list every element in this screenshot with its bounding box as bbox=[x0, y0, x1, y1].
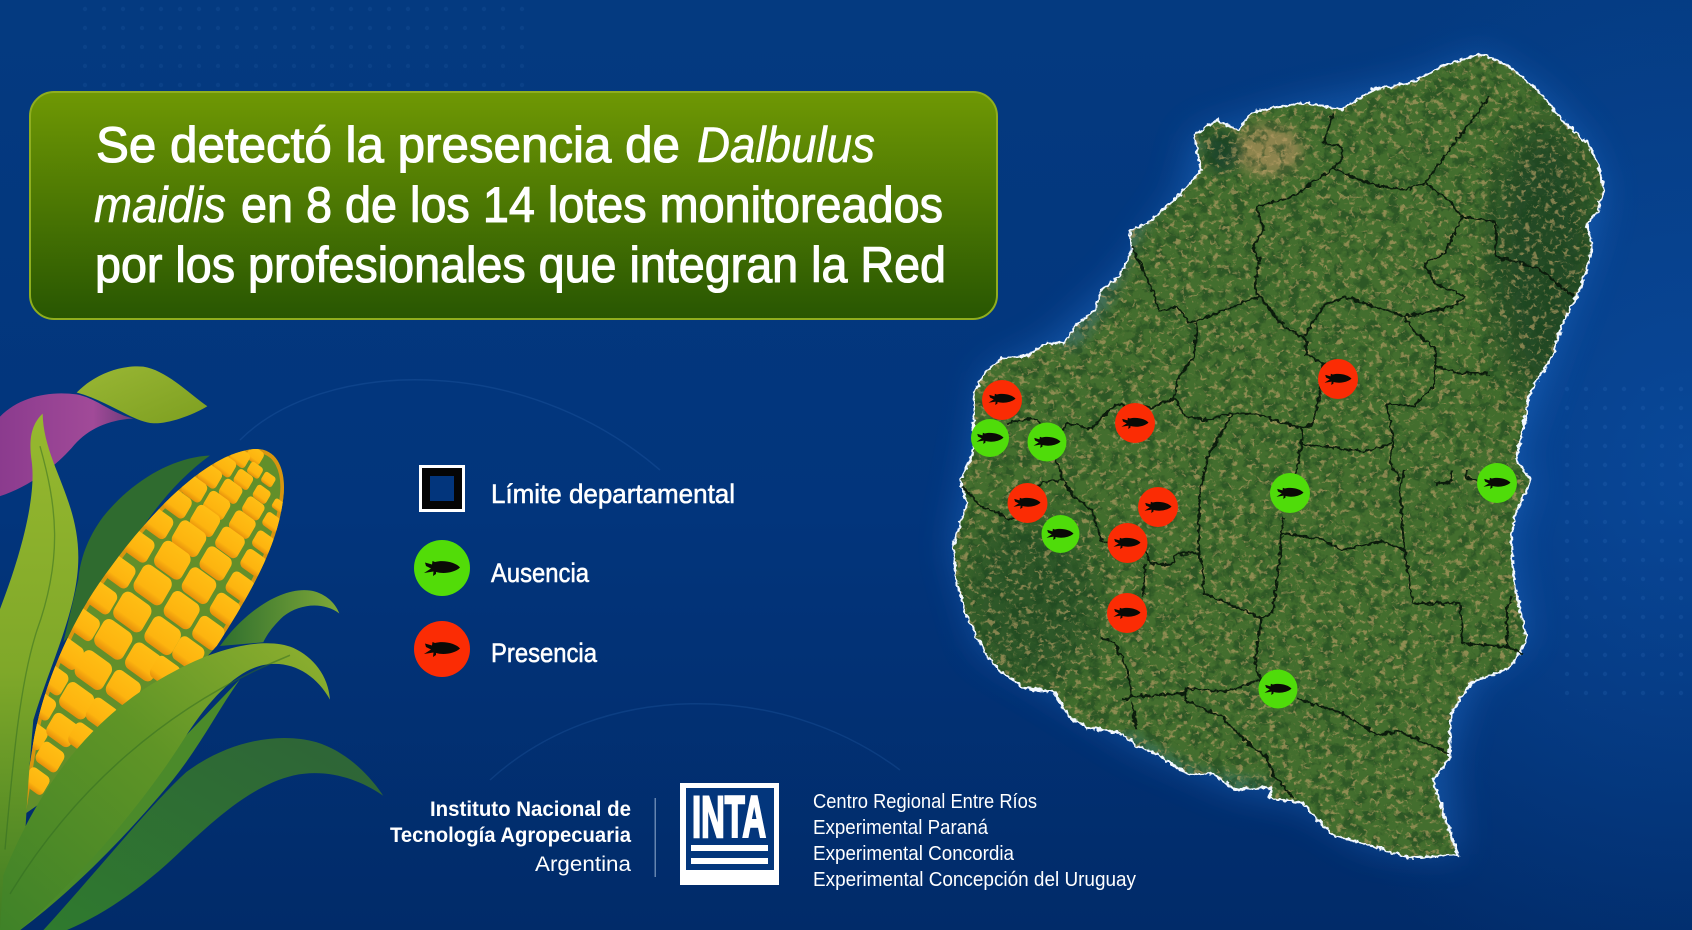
marker: presence bbox=[1107, 593, 1147, 633]
marker: presence bbox=[1008, 483, 1048, 523]
marker: presence bbox=[1138, 487, 1178, 527]
marker: absence bbox=[1028, 422, 1066, 462]
map glow bbox=[953, 54, 1604, 855]
marker: presence bbox=[1108, 523, 1148, 563]
department boundaries bbox=[962, 97, 1574, 798]
corn illustration bbox=[0, 366, 383, 930]
marker: absence bbox=[1258, 670, 1298, 708]
front leaf vein bbox=[10, 655, 290, 894]
lower mid leaf bbox=[13, 679, 240, 930]
left leaf vein bbox=[5, 446, 55, 850]
legend item: absence: Ausencia bbox=[491, 558, 590, 588]
monitoring markers bbox=[971, 359, 1517, 708]
title banner: maidis bbox=[94, 177, 226, 233]
marker: absence bbox=[1477, 463, 1517, 503]
title banner: Se detectó la presencia de bbox=[96, 117, 680, 173]
legend item: absence bbox=[414, 540, 590, 596]
title banner: por los profesionales que integran la Red bbox=[95, 237, 946, 293]
regional centres: Centro Regional Entre Ríos bbox=[813, 791, 1037, 813]
title banner bbox=[30, 92, 997, 319]
purple ribbon bbox=[0, 393, 133, 496]
legend item: presence bbox=[414, 621, 598, 677]
small right leaf bbox=[220, 590, 339, 646]
regional centres: Experimental Concepción del Uruguay bbox=[813, 869, 1136, 891]
department boundaries north bbox=[1007, 97, 1574, 480]
left tall leaf bbox=[0, 414, 78, 930]
title banner: Dalbulus bbox=[697, 117, 875, 173]
institute name: Tecnología Agropecuaria bbox=[390, 824, 631, 847]
marker: presence bbox=[982, 380, 1022, 420]
institute name: Instituto Nacional de bbox=[430, 798, 631, 821]
legend bbox=[414, 465, 735, 677]
marker: absence bbox=[1042, 515, 1080, 553]
dark back leaf bbox=[63, 455, 210, 642]
marker: absence bbox=[1270, 473, 1310, 513]
legend item: presence: Presencia bbox=[491, 638, 598, 668]
legend item: departmental limit bbox=[419, 465, 735, 512]
divider bbox=[654, 798, 656, 877]
legend item: departmental limit: Límite departamental bbox=[491, 479, 735, 509]
marker: presence bbox=[1318, 359, 1358, 399]
department boundaries south bbox=[962, 470, 1523, 798]
INTA footer bbox=[390, 783, 1136, 891]
regional centres: Experimental Paraná bbox=[813, 817, 989, 839]
land surface bbox=[940, 40, 1620, 870]
bottom dark leaf bbox=[43, 738, 383, 930]
institute name bbox=[390, 798, 631, 876]
marker: absence bbox=[971, 419, 1009, 457]
regional centres bbox=[813, 791, 1136, 891]
INTA logo bbox=[680, 783, 779, 885]
corn cob bbox=[26, 449, 284, 813]
large front leaf bbox=[0, 643, 330, 930]
marker: presence bbox=[1115, 403, 1155, 443]
coast outline bbox=[953, 54, 1604, 858]
INTA logo: INTA bbox=[692, 785, 766, 850]
top olive leaf bbox=[77, 366, 207, 423]
title banner: en 8 de los 14 lotes monitoreados bbox=[241, 177, 943, 233]
map of Entre Ríos bbox=[940, 40, 1620, 870]
regional centres: Experimental Concordia bbox=[813, 843, 1015, 865]
institute name: Argentina bbox=[535, 853, 631, 876]
